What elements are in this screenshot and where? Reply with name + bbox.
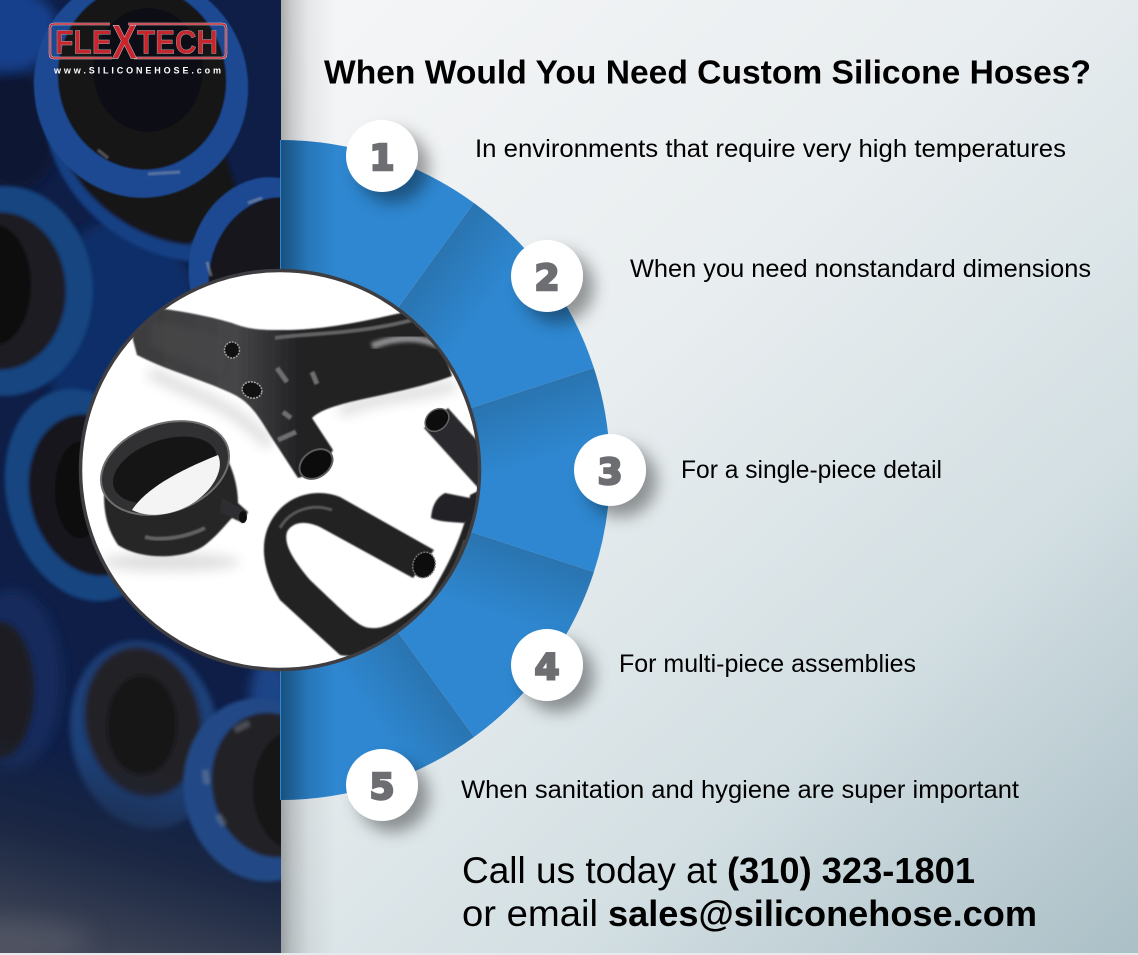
item 1 text: In environments that require very high temperatures (475, 135, 1066, 163)
top hose sleeve (44, 132, 194, 263)
segment 3 (470, 368, 610, 572)
badge 1: 1 (369, 138, 395, 179)
badge 3: 3 (597, 452, 623, 493)
soft shadows (100, 372, 455, 571)
large top hose (33, 0, 249, 199)
lower left hose (0, 622, 34, 758)
call to action: (310) 323-1801 (727, 850, 975, 891)
floor highlight (0, 920, 90, 955)
badge 4 (511, 629, 583, 701)
segment 5 (280, 632, 474, 800)
badge 4: 4 (534, 647, 560, 688)
item 2 text: When you need nonstandard dimensions (630, 255, 1091, 283)
phone line: Call us today at (462, 850, 718, 891)
call to action (462, 850, 1037, 934)
item 5 text: When sanitation and hygiene are super important (461, 776, 1019, 804)
badge 5 (346, 749, 418, 821)
panel edge shadow (281, 0, 336, 953)
logo: Flextech: TECH (137, 24, 218, 60)
badge 1 (346, 120, 418, 192)
arc: five segments (280, 140, 610, 800)
hose: upper right stub (423, 407, 478, 488)
right hose (188, 176, 280, 290)
port holes (224, 342, 240, 358)
hose: Y branch (133, 307, 452, 478)
lower right hose (181, 698, 281, 884)
logo: Flextech: X (112, 16, 137, 70)
middle hose (3, 388, 124, 603)
badge 2: 2 (534, 258, 560, 299)
logo wordmark: FLE (55, 24, 112, 60)
badge 5: 5 (369, 767, 395, 808)
hose: ring coupler (104, 450, 248, 556)
badge 3 (574, 434, 646, 506)
badge 2 (511, 240, 583, 312)
item 3 text: For a single-piece detail (681, 456, 942, 484)
email line: or email (462, 893, 598, 934)
item 4 text: For multi-piece assemblies (619, 650, 916, 678)
hose: small stub (431, 493, 480, 523)
call to action: sales@siliconehose.com (608, 893, 1037, 934)
segment 2 (398, 203, 594, 408)
hose: U bend (264, 490, 483, 656)
photo: blue silicone hoses (0, 0, 281, 953)
arc edge shading (281, 140, 336, 800)
segment 1 (280, 140, 474, 308)
product photo circle (80, 270, 490, 670)
title: When Would You Need Custom Silicone Hoses? (324, 54, 1091, 92)
floor gradient (0, 767, 281, 953)
segment 4 (398, 532, 594, 737)
logo url: www.SILICONEHOSE.com (53, 66, 221, 76)
lower middle hose (68, 638, 217, 830)
left hose (0, 186, 93, 396)
logo: Flextech (50, 16, 226, 76)
logo frame (50, 24, 226, 58)
